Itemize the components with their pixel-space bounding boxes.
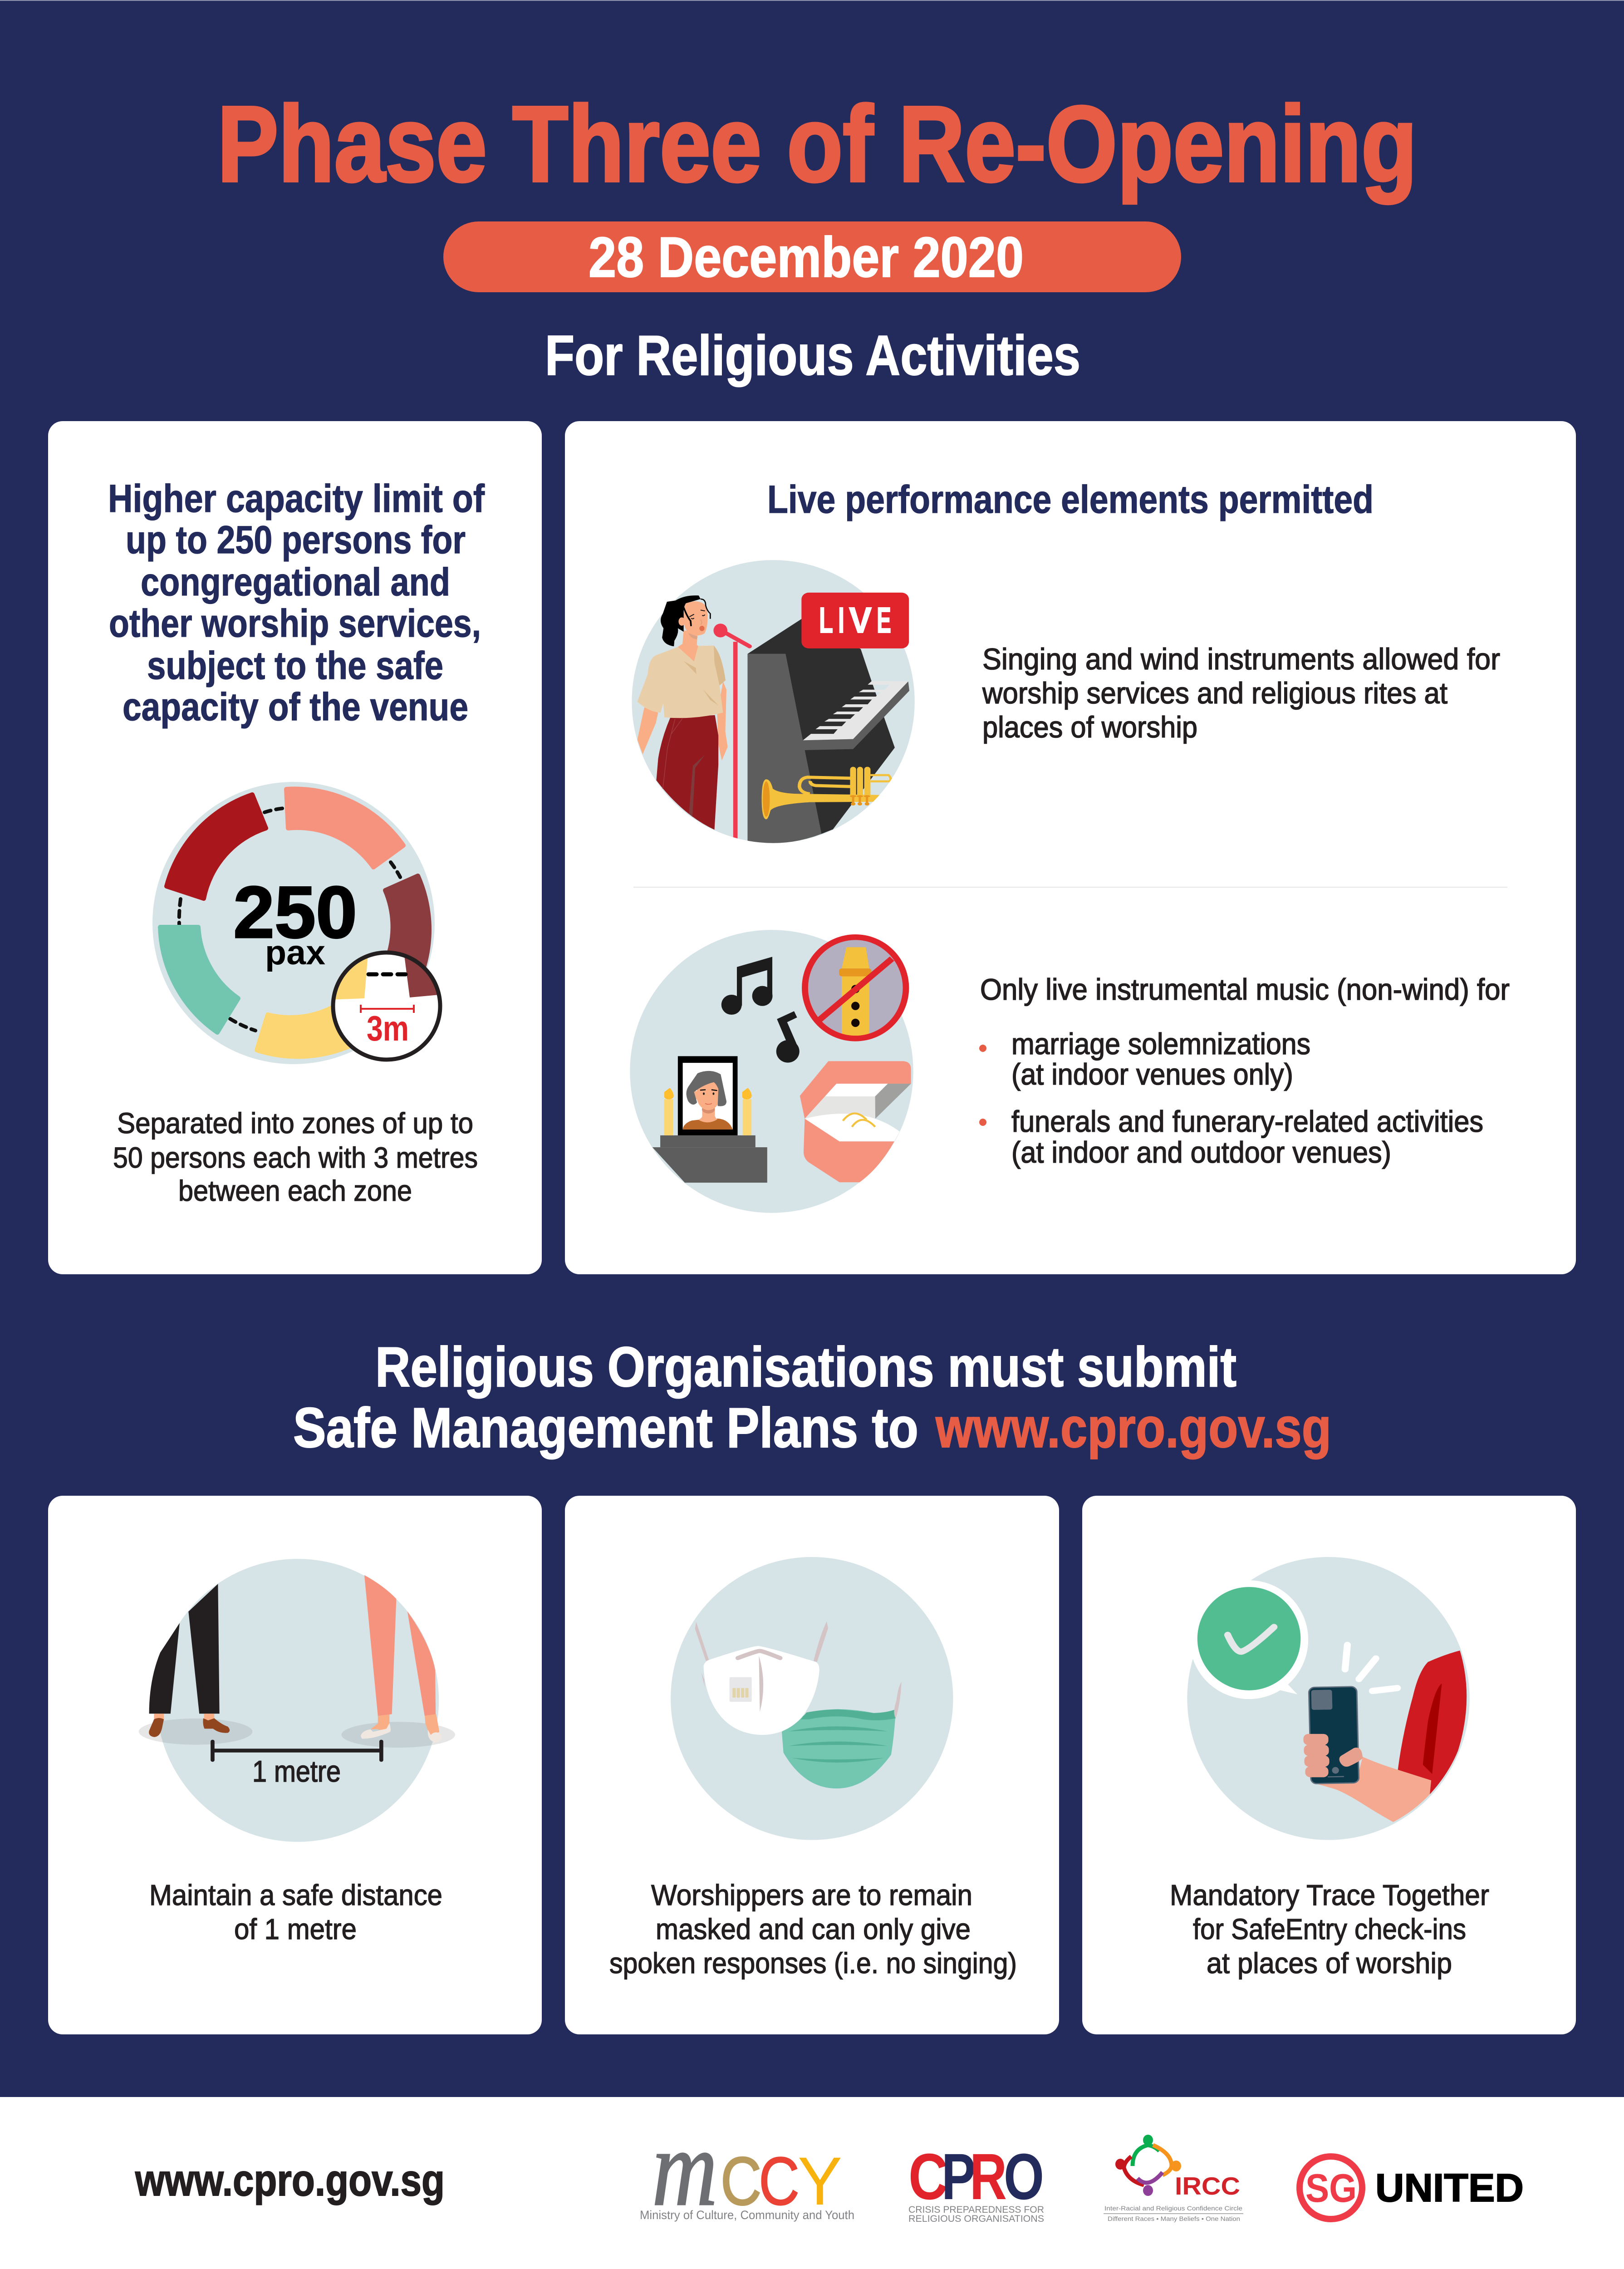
logo: MCCY: C xyxy=(721,2143,761,2219)
section heading: safe management plans: www.cpro.gov.sg xyxy=(935,1397,1331,1459)
logo: IRCC: Inter-Racial and Religious Confidence Circle xyxy=(1104,2205,1242,2212)
live badge label: L xyxy=(819,600,833,640)
one metre label: 1 metre xyxy=(252,1754,341,1788)
singing text: Singing and wind instruments allowed for xyxy=(982,642,1500,676)
logo: MCCY: Ministry of Culture, Community and Youth xyxy=(640,2208,854,2222)
masks caption: masked and can only give xyxy=(656,1913,971,1945)
250 pax label: pax xyxy=(265,933,325,972)
capacity heading: up to 250 persons for xyxy=(126,518,466,562)
logo: IRCC: IRCC xyxy=(1175,2172,1240,2200)
logo: CPRO: CRISIS PREPAREDNESS FOR xyxy=(908,2205,1044,2215)
singing text xyxy=(982,642,1500,744)
title: Phase Three of Re-Opening xyxy=(217,84,1417,204)
logo: CPRO: O xyxy=(1004,2140,1044,2213)
logo: CPRO: RELIGIOUS ORGANISATIONS xyxy=(908,2214,1044,2224)
capacity heading xyxy=(108,477,485,729)
section heading: safe management plans: Religious Organisations must submit xyxy=(375,1336,1236,1399)
icon: one metre distance xyxy=(139,1559,455,1842)
trace together caption: for SafeEntry check-ins xyxy=(1193,1913,1466,1945)
panel: safe distance xyxy=(48,1496,542,2034)
phone xyxy=(1309,1687,1359,1784)
live performance heading: Live performance elements permitted xyxy=(767,478,1374,521)
footer xyxy=(0,2097,1624,2269)
live badge label: E xyxy=(877,600,891,640)
logo: MCCY: m xyxy=(652,2107,717,2228)
panel: trace together xyxy=(1082,1496,1576,2034)
logo: IRCC xyxy=(1104,2135,1243,2222)
icon: phone check-in xyxy=(1187,1557,1470,1840)
footer url: www.cpro.gov.sg xyxy=(135,2155,445,2205)
panel: live performance xyxy=(565,421,1576,1274)
masks caption xyxy=(609,1879,1017,1979)
music notes xyxy=(721,957,800,1063)
capacity caption: between each zone xyxy=(178,1174,412,1207)
capacity heading: capacity of the venue xyxy=(123,685,468,729)
magnifier: 3m spacing: 3m xyxy=(367,1008,409,1048)
live badge label: V xyxy=(849,600,872,640)
capacity caption: 50 persons each with 3 metres xyxy=(113,1141,478,1174)
logo: IRCC: Different Races • Many Beliefs • One Nation xyxy=(1108,2215,1240,2222)
logo: MCCY xyxy=(640,2107,854,2228)
logo: MCCY: Y xyxy=(798,2143,842,2219)
zone diagram xyxy=(152,782,449,1064)
trace together caption: at places of worship xyxy=(1207,1947,1452,1979)
safe distance caption: of 1 metre xyxy=(234,1913,357,1945)
logo: CPRO: C xyxy=(908,2140,948,2213)
safe distance caption: Maintain a safe distance xyxy=(149,1879,442,1911)
live badge label: I xyxy=(838,600,844,640)
capacity heading: other worship services, xyxy=(109,602,481,645)
check bubble xyxy=(1190,1580,1308,1699)
logo: CPRO xyxy=(908,2140,1044,2224)
capacity heading: congregational and xyxy=(141,560,450,604)
magnifier: 3m spacing xyxy=(331,950,442,1062)
logo: CPRO: P xyxy=(942,2140,976,2213)
icon: masks xyxy=(671,1557,953,1840)
panel: capacity limit xyxy=(48,421,542,1274)
masks caption: Worshippers are to remain xyxy=(651,1879,972,1911)
music rules text xyxy=(979,972,1510,1169)
trace together caption: Mandatory Trace Together xyxy=(1170,1879,1489,1911)
capacity caption xyxy=(113,1107,478,1207)
no-flute sign xyxy=(803,936,908,1040)
logo: SG United: SG xyxy=(1305,2166,1357,2210)
music rules text: marriage solemnizations xyxy=(1011,1027,1310,1061)
logo: CPRO: R xyxy=(970,2140,1007,2213)
masks caption: spoken responses (i.e. no singing) xyxy=(609,1947,1017,1979)
logo: MCCY: C xyxy=(759,2143,800,2219)
date pill: 28 December 2020 xyxy=(589,226,1024,289)
memorial altar xyxy=(653,1056,767,1183)
music rules text: (at indoor venues only) xyxy=(1011,1057,1293,1091)
capacity caption: Separated into zones of up to xyxy=(117,1107,473,1139)
section heading: safe management plans xyxy=(293,1336,1331,1459)
date pill xyxy=(443,221,1181,292)
capacity heading: subject to the safe xyxy=(147,644,443,688)
panel: masks xyxy=(565,1496,1059,2034)
capacity heading: Higher capacity limit of xyxy=(108,477,485,521)
music rules text: Only live instrumental music (non-wind) for xyxy=(980,972,1510,1006)
logo: SG United: UNITED xyxy=(1375,2166,1524,2210)
live badge label xyxy=(819,600,891,640)
icon: singer, piano and trumpet xyxy=(632,560,915,843)
subtitle: For Religious Activities xyxy=(545,324,1080,387)
safe distance caption xyxy=(149,1879,442,1945)
music rules text: (at indoor and outdoor venues) xyxy=(1011,1135,1391,1169)
trace together caption xyxy=(1170,1879,1489,1979)
icon: no wind instruments, memorial and ring box xyxy=(630,930,913,1213)
section heading: safe management plans: Safe Management Plans to xyxy=(293,1397,918,1459)
singing text: worship services and religious rites at xyxy=(982,676,1447,710)
music rules text: funerals and funerary-related activities xyxy=(1011,1105,1483,1138)
singing text: places of worship xyxy=(982,710,1197,744)
ring box xyxy=(800,1061,911,1182)
250 pax label: 250 xyxy=(233,871,357,953)
logo: SG United xyxy=(1300,2156,1524,2219)
